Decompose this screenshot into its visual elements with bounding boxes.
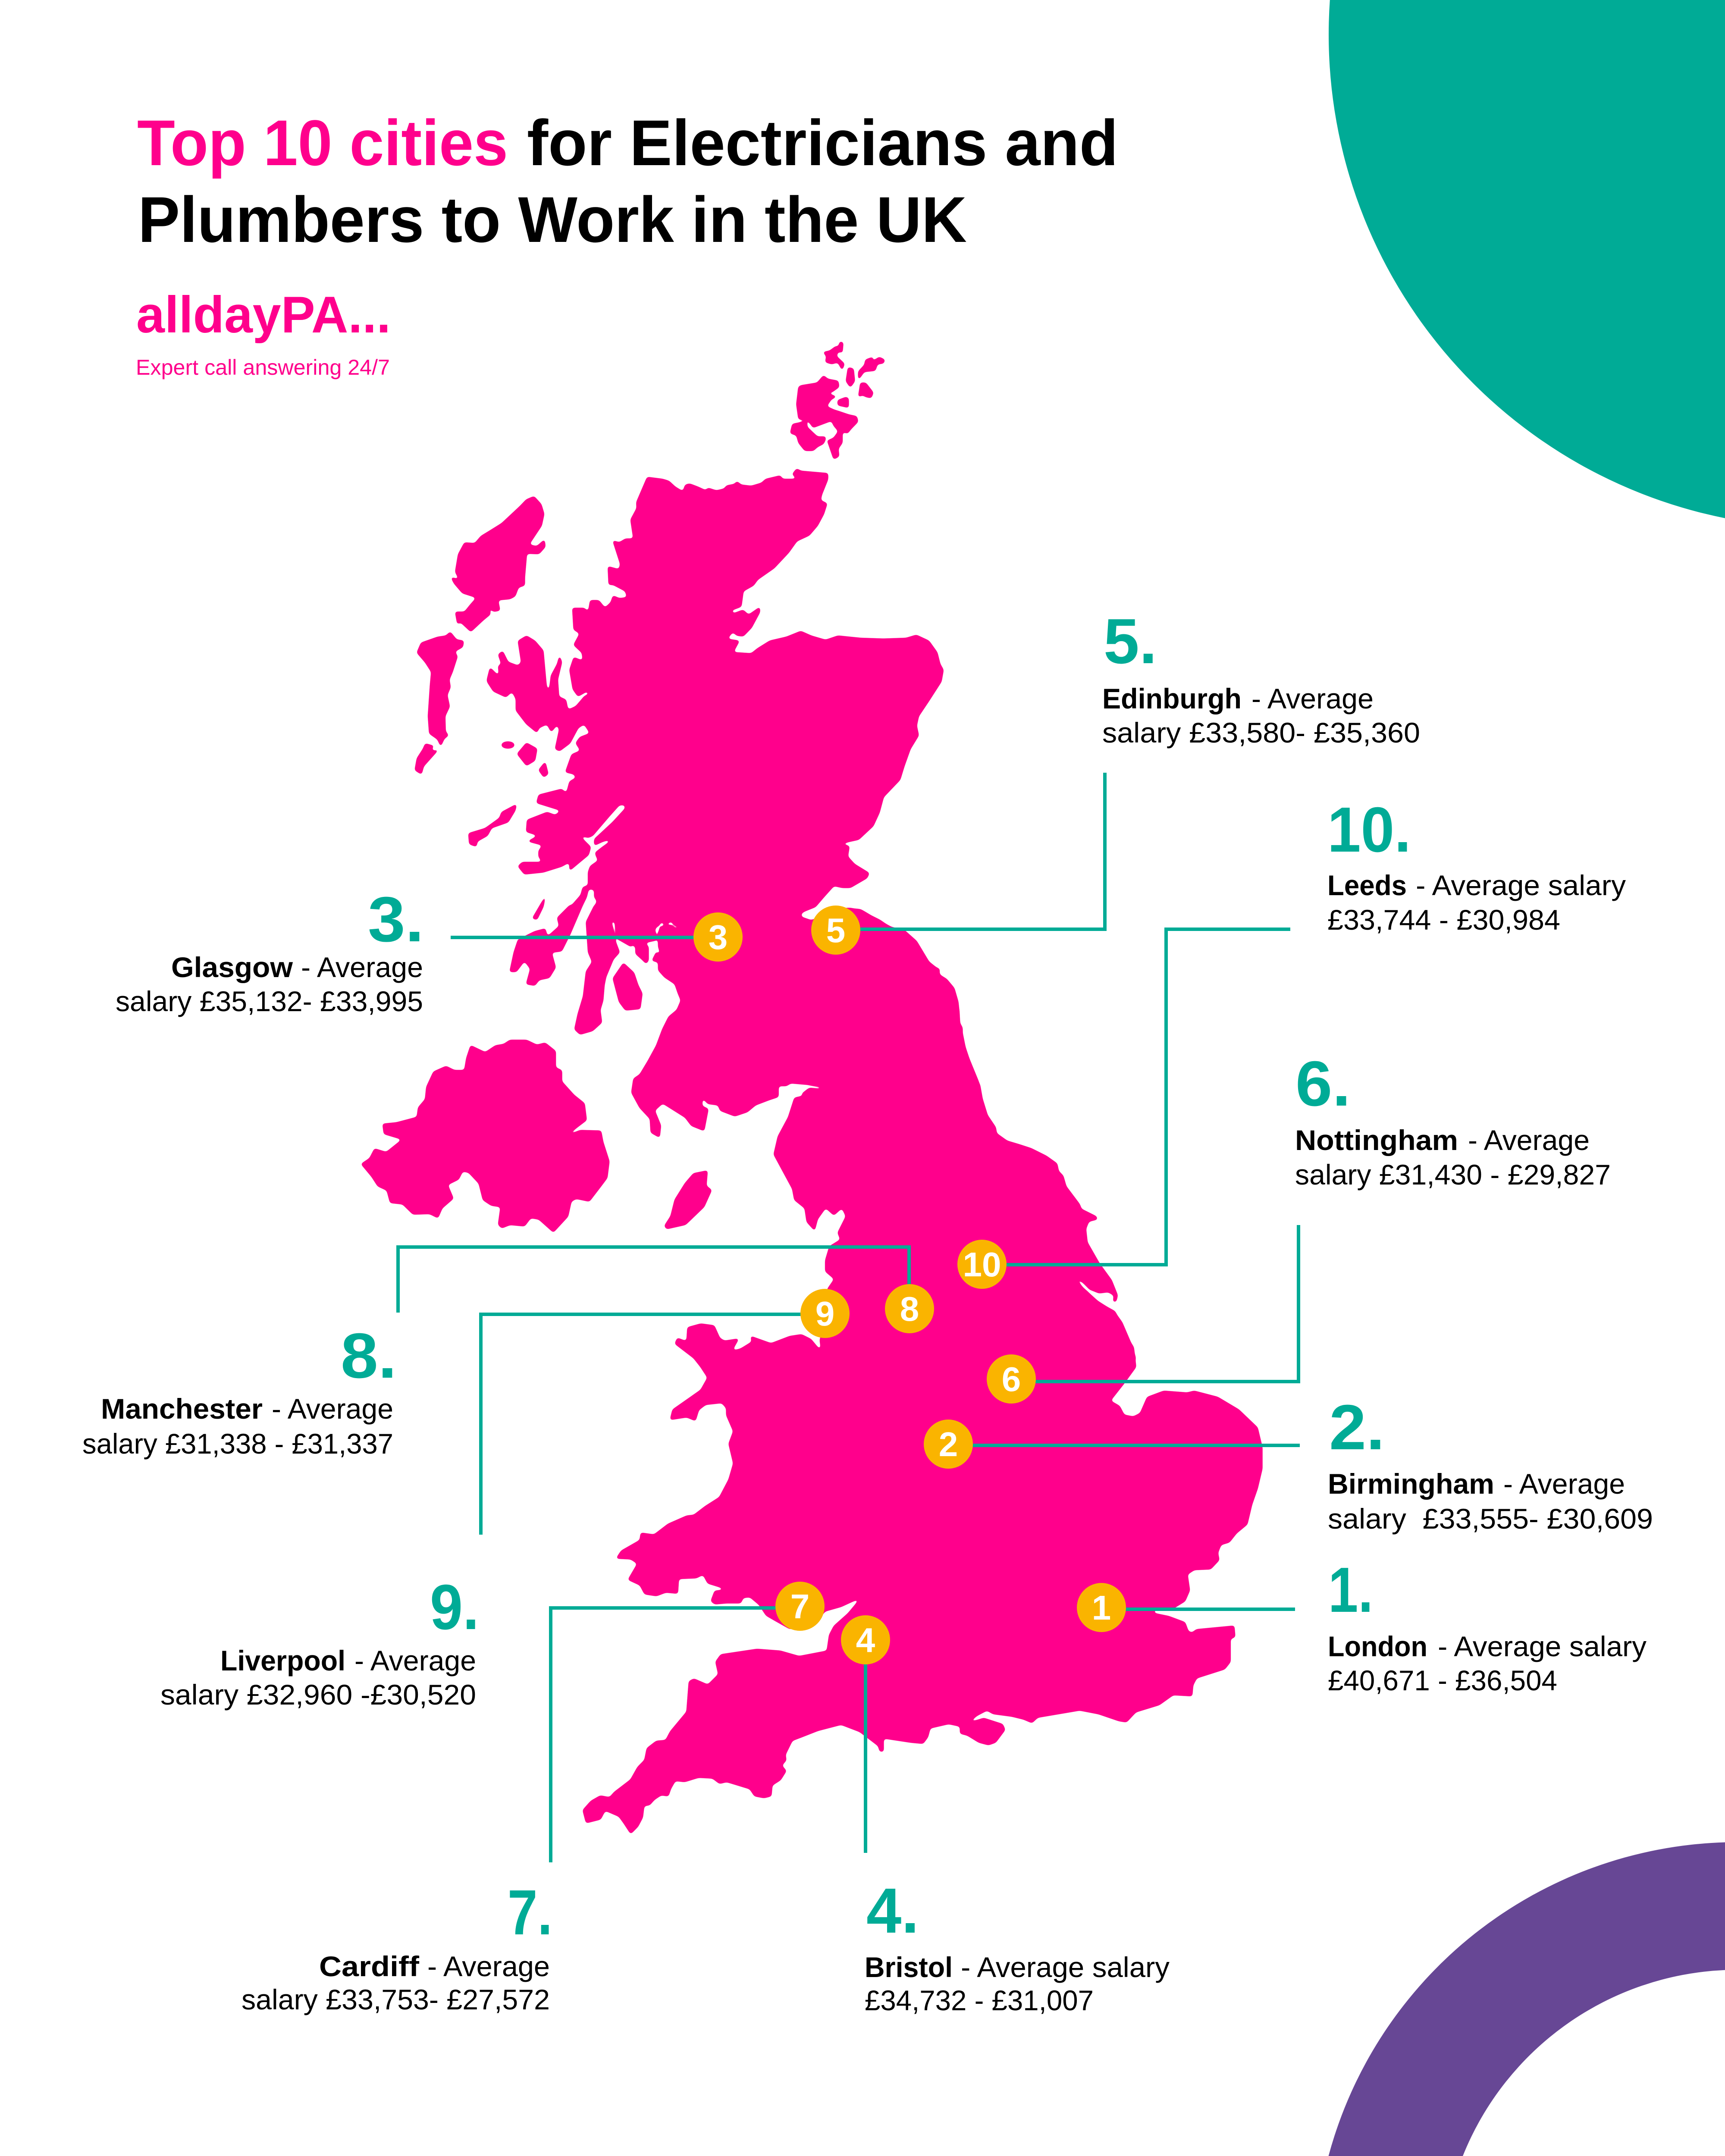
city marker 2 (924, 1420, 973, 1469)
label: 7 Cardiff: - Average (427, 1950, 550, 1982)
city marker 2: 2 (939, 1425, 958, 1463)
label: 4 Bristol: £34,732 - £31,007 (865, 1984, 1094, 2016)
connector lines (398, 773, 1300, 1862)
title: Top 10 cities (137, 107, 508, 179)
label: 2 Birmingham: Birmingham (1328, 1468, 1494, 1500)
city marker 10 (957, 1240, 1007, 1289)
label: 6 Nottingham: - Average (1468, 1124, 1590, 1156)
city marker 7: 7 (790, 1587, 809, 1626)
label: 2 Birmingham (1328, 1392, 1653, 1535)
label: 7 Cardiff (242, 1877, 552, 2015)
city marker 7 (775, 1582, 825, 1631)
label: 9 Liverpool: - Average (354, 1645, 476, 1677)
label: 1 London (1328, 1554, 1647, 1696)
label: 1 London: 1. (1328, 1554, 1373, 1626)
city marker 10: 10 (963, 1245, 1001, 1284)
city marker 6: 6 (1002, 1360, 1021, 1398)
label: 3 Glasgow: Glasgow (171, 951, 293, 983)
city marker 3 (693, 912, 743, 962)
label: 3 Glasgow: - Average (301, 951, 423, 983)
decorative teal circle top right (1329, 0, 1725, 518)
title: Plumbers to Work in the UK (138, 183, 967, 256)
label: 4 Bristol: 4. (866, 1875, 919, 1946)
title (137, 107, 1118, 256)
label: 6 Nottingham: salary £31,430 - £29,827 (1295, 1159, 1611, 1191)
label: 6 Nottingham (1295, 1048, 1611, 1191)
city marker 5: 5 (826, 911, 845, 950)
city marker 3: 3 (709, 918, 728, 956)
label: 7 Cardiff: Cardiff (319, 1950, 420, 1982)
label: 1 London: - Average salary (1438, 1630, 1647, 1662)
label: 9 Liverpool: Liverpool (220, 1645, 345, 1677)
label: 1 London: London (1328, 1630, 1427, 1662)
label: 5 Edinburgh: 5. (1104, 606, 1157, 677)
north-east England coast (850, 908, 1135, 1358)
label: 10 Leeds: £33,744 - £30,984 (1327, 904, 1560, 936)
label: 5 Edinburgh: - Average (1251, 683, 1374, 714)
label: 10 Leeds: Leeds (1327, 869, 1407, 901)
label: 8 Manchester (82, 1320, 397, 1460)
logo: alldayPA: Expert call answering 24/7 (136, 355, 390, 379)
map of the UK (361, 342, 1262, 1833)
label: 6 Nottingham: Nottingham (1295, 1124, 1458, 1156)
city marker 5 (811, 906, 860, 955)
Wales and southern England (583, 1294, 1262, 1833)
label: 9 Liverpool: salary £32,960 -£30,520 (160, 1679, 476, 1711)
label: 8 Manchester: Manchester (101, 1393, 263, 1425)
label: 5 Edinburgh: salary £33,580- £35,360 (1102, 717, 1420, 749)
southern Scotland, northern England, Northern Ireland, Isle of Man (361, 906, 993, 1318)
city marker 9 (800, 1289, 850, 1338)
label: 2 Birmingham: salary £33,555- £30,609 (1328, 1503, 1653, 1535)
label: 7 Cardiff: 7. (508, 1877, 552, 1948)
label: 4 Bristol: Bristol (865, 1951, 953, 1983)
title: for Electricians and (527, 107, 1118, 179)
label: 10 Leeds (1327, 794, 1626, 936)
city marker 1 (1077, 1583, 1126, 1632)
label: 8 Manchester: - Average (272, 1393, 393, 1425)
city marker 6 (987, 1354, 1036, 1404)
label: 8 Manchester: salary £31,338 - £31,337 (82, 1428, 393, 1460)
label: 6 Nottingham: 6. (1295, 1048, 1351, 1119)
label: 8 Manchester: 8. (341, 1320, 397, 1391)
label: 1 London: £40,671 - £36,504 (1328, 1664, 1557, 1696)
label: 2 Birmingham: 2. (1329, 1392, 1385, 1463)
city marker 8: 8 (900, 1290, 919, 1328)
label: 5 Edinburgh: Edinburgh (1102, 683, 1242, 714)
city marker 1: 1 (1092, 1589, 1111, 1627)
label: 7 Cardiff: salary £33,753- £27,572 (242, 1984, 550, 2015)
label: 9 Liverpool: 9. (430, 1572, 479, 1643)
label: 10 Leeds: - Average salary (1416, 869, 1626, 901)
label: 9 Liverpool (160, 1572, 479, 1711)
decorative purple arc bottom right (1329, 1842, 1725, 2156)
label: 3 Glasgow (116, 884, 424, 1017)
city marker 4: 4 (856, 1621, 875, 1659)
label: 5 Edinburgh (1102, 606, 1420, 749)
logo: alldayPA (136, 286, 391, 379)
label: 3 Glasgow: salary £35,132- £33,995 (116, 985, 423, 1017)
label: 3 Glasgow: 3. (368, 884, 424, 955)
city marker 8 (885, 1284, 934, 1333)
label: 4 Bristol: - Average salary (961, 1951, 1170, 1983)
logo: alldayPA: alldayPA... (136, 286, 391, 344)
Scotland and islands (415, 342, 943, 919)
city marker 4 (841, 1615, 890, 1664)
label: 4 Bristol (865, 1875, 1170, 2016)
label: 10 Leeds: 10. (1327, 794, 1411, 865)
label: 2 Birmingham: - Average (1503, 1468, 1625, 1500)
city marker 9: 9 (815, 1294, 834, 1333)
